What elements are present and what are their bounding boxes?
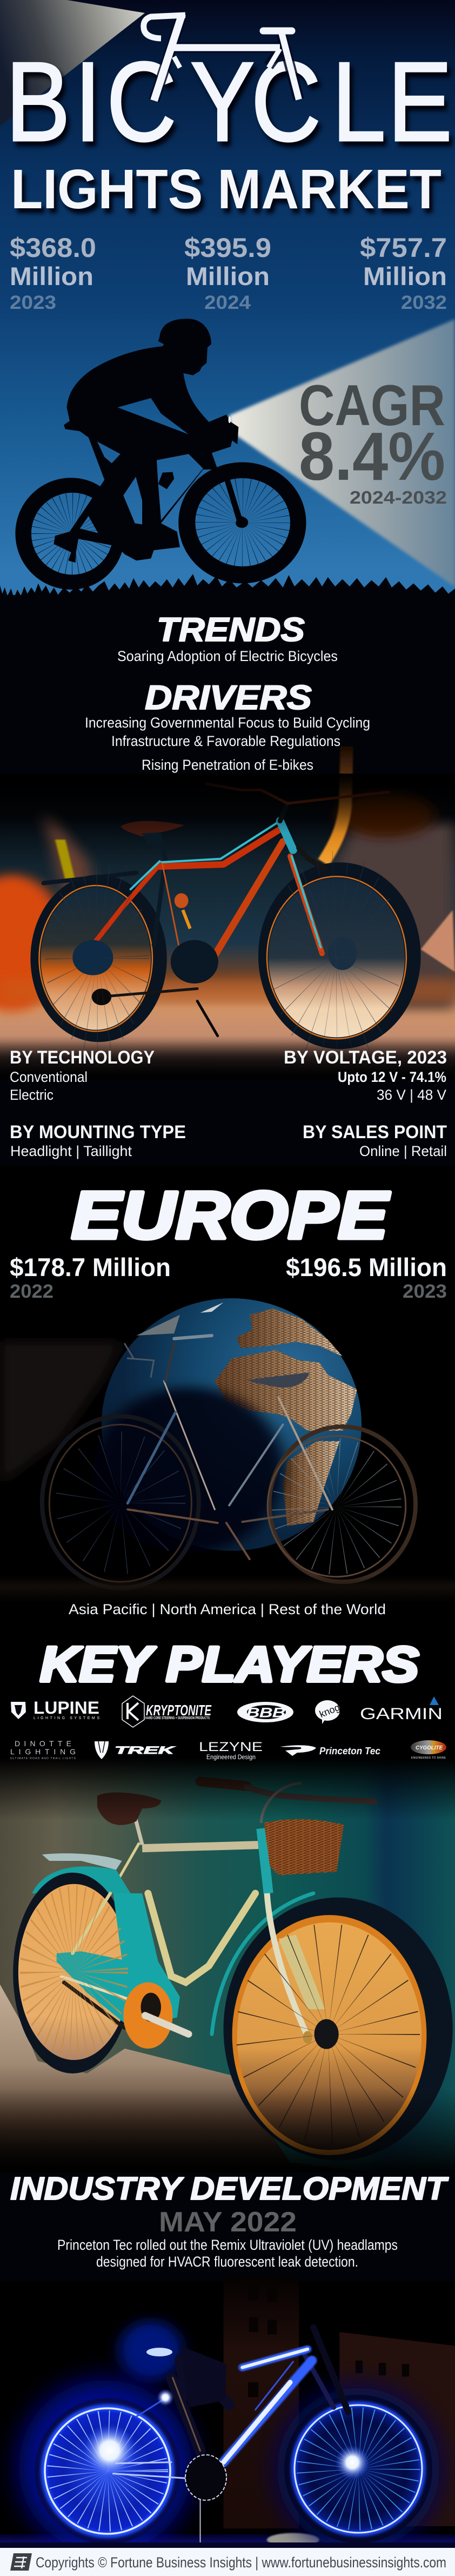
logo: dinotte lighting: ULTIMATE ROAD AND TRAIL LIGHTS bbox=[10, 1757, 76, 1760]
text: driver two: Rising Penetration of E-bikes bbox=[142, 757, 313, 773]
hubs and crank bbox=[72, 940, 113, 975]
rear spokes bbox=[71, 911, 123, 1005]
segment: by voltage bbox=[284, 1047, 447, 1103]
logo: lupine bbox=[11, 1698, 99, 1720]
fade continued to black bbox=[0, 1079, 455, 1166]
text: development description: Princeton Tec rolled out the Remix Ultraviolet (UV) headlamps bbox=[57, 2237, 398, 2253]
logo: cygolite bbox=[411, 1740, 446, 1760]
stat: 2032 market size bbox=[360, 233, 447, 313]
logo: bbb bbox=[237, 1702, 293, 1722]
logo: lezyne: Engineered Design bbox=[206, 1753, 256, 1761]
stat: europe 2023: $196.5 Million bbox=[286, 1253, 447, 1282]
black band bbox=[0, 595, 455, 784]
wall bbox=[0, 1758, 455, 2175]
logo: cygolite: CYGOLITE bbox=[416, 1745, 443, 1751]
rear wheel bbox=[13, 1873, 132, 2073]
segment: by technology: BY TECHNOLOGY bbox=[10, 1047, 155, 1068]
text: trend item: Soaring Adoption of Electric Bicycles bbox=[117, 648, 338, 664]
rear wheel bbox=[30, 875, 167, 1042]
top fade bbox=[0, 1758, 455, 1820]
panel: hero sky bbox=[0, 0, 455, 600]
headlight beam from rider bbox=[229, 319, 455, 587]
logo: knog: knog. bbox=[318, 1701, 344, 1720]
black band behind heading bbox=[0, 2172, 455, 2281]
bicycle frame on title bbox=[144, 14, 299, 101]
panel: globe and bicycle photo bbox=[0, 1298, 455, 1603]
night scene bbox=[0, 2277, 455, 2548]
heading: industry development: INDUSTRY DEVELOPMENT bbox=[10, 2171, 449, 2207]
crank bbox=[123, 1983, 173, 2049]
rear wheel spokes bbox=[52, 513, 93, 554]
light streaks and bike bbox=[0, 747, 455, 1049]
segment: by sales point bbox=[303, 1122, 447, 1159]
stat: 2023 market size: Million bbox=[10, 262, 93, 290]
sidewalk bbox=[0, 1984, 455, 2183]
rear wheel spokes bbox=[88, 1467, 153, 1538]
segment: by technology bbox=[10, 1047, 155, 1103]
segment: by mounting type: Headlight | Taillight bbox=[10, 1143, 132, 1159]
teal chainguard and frame bbox=[57, 1893, 180, 2026]
segment: by sales point: BY SALES POINT bbox=[303, 1122, 447, 1142]
front wheel spokes bbox=[282, 1979, 374, 2089]
logo row one bbox=[11, 1696, 443, 1727]
front wheel outer glow bbox=[277, 2388, 439, 2550]
logo: princeton tec: Princeton Tec bbox=[319, 1746, 380, 1756]
segment: by technology: Electric bbox=[10, 1087, 53, 1103]
heading: drivers: DRIVERS bbox=[145, 679, 312, 717]
logo: garmin: GARMIN bbox=[360, 1705, 443, 1723]
saddle bbox=[246, 1372, 309, 1388]
front wheel bbox=[223, 1898, 453, 2161]
frame with LED strips bbox=[113, 2328, 348, 2542]
footer background bbox=[0, 2548, 455, 2576]
segment: by mounting type: BY MOUNTING TYPE bbox=[10, 1122, 186, 1142]
front wheel spokes bbox=[219, 500, 266, 545]
bicycle frame bbox=[125, 1336, 332, 1559]
stat: 2032 market size: Million bbox=[363, 262, 447, 290]
front spokes bbox=[304, 904, 369, 1012]
land texture bbox=[215, 1309, 357, 1526]
stat: europe 2023: 2023 bbox=[403, 1281, 447, 1302]
frame tubes bbox=[44, 784, 389, 1036]
stat: 2023 market size: $368.0 bbox=[10, 233, 96, 263]
panel: neon bicycle photo bbox=[0, 2277, 455, 2553]
grass ground bbox=[0, 574, 455, 615]
logo row two bbox=[10, 1739, 446, 1761]
rear wheel outer glow bbox=[19, 2380, 192, 2553]
panel: teal bicycle photo bbox=[0, 1758, 455, 2183]
logo: lezyne bbox=[199, 1740, 263, 1761]
stat: 2023 market size bbox=[10, 233, 96, 313]
rear wheel spokes bbox=[47, 1928, 101, 2015]
panel: orange electric bike photo bbox=[0, 747, 455, 1082]
logo: kryptonite bbox=[122, 1696, 212, 1727]
photo top fade bbox=[0, 774, 455, 833]
stat: europe 2022: $178.7 Million bbox=[10, 1253, 171, 1282]
saddle lights bbox=[146, 2348, 172, 2356]
illustration: cyclist silhouette bbox=[15, 319, 306, 590]
photo bottom fade bbox=[0, 1041, 455, 1079]
text: other regions: Asia Pacific | North America | Rest of the World bbox=[69, 1601, 386, 1617]
segment: by technology: Conventional bbox=[10, 1069, 88, 1085]
text: driver one bbox=[85, 715, 370, 749]
stat: 2024 market size bbox=[184, 233, 271, 313]
logo: fortune business insights bbox=[10, 2553, 32, 2571]
logo: lezyne: LEZYNE bbox=[199, 1740, 263, 1754]
logo: dinotte lighting: LIGHTING bbox=[10, 1747, 76, 1756]
front hub glow bbox=[335, 2445, 370, 2480]
fork and hub bbox=[267, 1893, 307, 2036]
stat: 2023 market size: 2023 bbox=[10, 292, 56, 313]
floor glow bbox=[0, 1576, 455, 1603]
stat: 2032 market size: $757.7 bbox=[360, 233, 447, 263]
logo: dinotte lighting: DINOTTE bbox=[15, 1739, 71, 1748]
text: driver one: Infrastructure & Favorable Regulations bbox=[111, 733, 340, 749]
logo: trek: TREK bbox=[115, 1745, 176, 1756]
stat: europe 2022 bbox=[10, 1253, 171, 1302]
stat: europe 2022: 2022 bbox=[10, 1281, 53, 1302]
front wheel spokes bbox=[304, 1472, 369, 1541]
footer bar bbox=[0, 2548, 455, 2576]
segment: by voltage: BY VOLTAGE, 2023 bbox=[284, 1047, 447, 1068]
callout: cagr: 2024-2032 bbox=[350, 487, 447, 507]
text: driver one: Increasing Governmental Focus to Build Cycling bbox=[85, 715, 370, 731]
date: may 2022: MAY 2022 bbox=[159, 2207, 297, 2238]
logo: lupine: LUPINE bbox=[34, 1698, 99, 1718]
front wheel tyre and LED ring bbox=[284, 2395, 432, 2543]
wall light bbox=[0, 1342, 122, 1484]
globe shadow bbox=[93, 1388, 284, 1553]
seat joint glow bbox=[157, 2389, 174, 2406]
rear wheel tyre and LED ring bbox=[35, 2398, 180, 2544]
stat: 2024 market size: Million bbox=[186, 262, 270, 290]
callout: cagr: 8.4% bbox=[299, 418, 445, 494]
bicycle tyres and rims bbox=[42, 1416, 416, 1588]
callout: cagr bbox=[299, 373, 447, 507]
frame pack bbox=[180, 2346, 226, 2407]
logo: princeton tec bbox=[280, 1745, 380, 1756]
title word bicycle: BICYCLE bbox=[5, 39, 452, 165]
segment: by sales point: Online | Retail bbox=[359, 1143, 447, 1159]
stat: 2024 market size: $395.9 bbox=[184, 233, 271, 263]
text: development description: designed for HVACR fluorescent leak detection. bbox=[96, 2254, 358, 2270]
africa and europe land bbox=[136, 1303, 357, 1526]
logo: lupine: LIGHTING SYSTEMS bbox=[34, 1716, 99, 1720]
lower bike parts bbox=[13, 1873, 453, 2161]
stat: 2024 market size: 2024 bbox=[204, 292, 251, 313]
logo: cygolite: ENGINEERED TO SHINE bbox=[411, 1756, 446, 1760]
segment: by mounting type bbox=[10, 1122, 186, 1159]
heading: trends: TRENDS bbox=[157, 611, 305, 649]
text: development description bbox=[57, 2237, 398, 2270]
stat: europe 2023 bbox=[286, 1253, 447, 1302]
logo: bbb: BBB bbox=[246, 1706, 285, 1720]
logo: garmin bbox=[360, 1696, 443, 1723]
bottom edge fade bbox=[0, 2542, 455, 2548]
chainring bbox=[185, 2455, 226, 2500]
saddle bbox=[121, 821, 184, 836]
upper bike parts bbox=[32, 1781, 374, 1893]
heading: key players: KEY PLAYERS bbox=[40, 1637, 419, 1692]
wheels and rider bbox=[15, 319, 306, 590]
headlight beam top left bbox=[0, 0, 145, 126]
title line lights market: LIGHTS MARKET bbox=[11, 158, 441, 220]
heading: europe: EUROPE bbox=[71, 1178, 390, 1253]
logo: dinotte lighting bbox=[10, 1739, 76, 1760]
logo: kryptonite: HARD CORE STEERING + SUSPENSION PRODUCTS bbox=[145, 1716, 210, 1720]
sky gradient bbox=[0, 0, 455, 600]
front wheel bbox=[258, 862, 421, 1049]
wheel hub glows bbox=[83, 2423, 137, 2478]
logo: kryptonite: KRYPTONITE bbox=[146, 1702, 212, 1719]
title bbox=[5, 14, 452, 220]
segment: by voltage: 36 V | 48 V bbox=[377, 1087, 446, 1103]
logo: trek bbox=[95, 1741, 176, 1759]
stat: 2032 market size: 2032 bbox=[401, 292, 447, 313]
photo background bbox=[0, 774, 455, 1082]
bottom fade bbox=[0, 2088, 455, 2175]
globe bbox=[102, 1298, 362, 1551]
